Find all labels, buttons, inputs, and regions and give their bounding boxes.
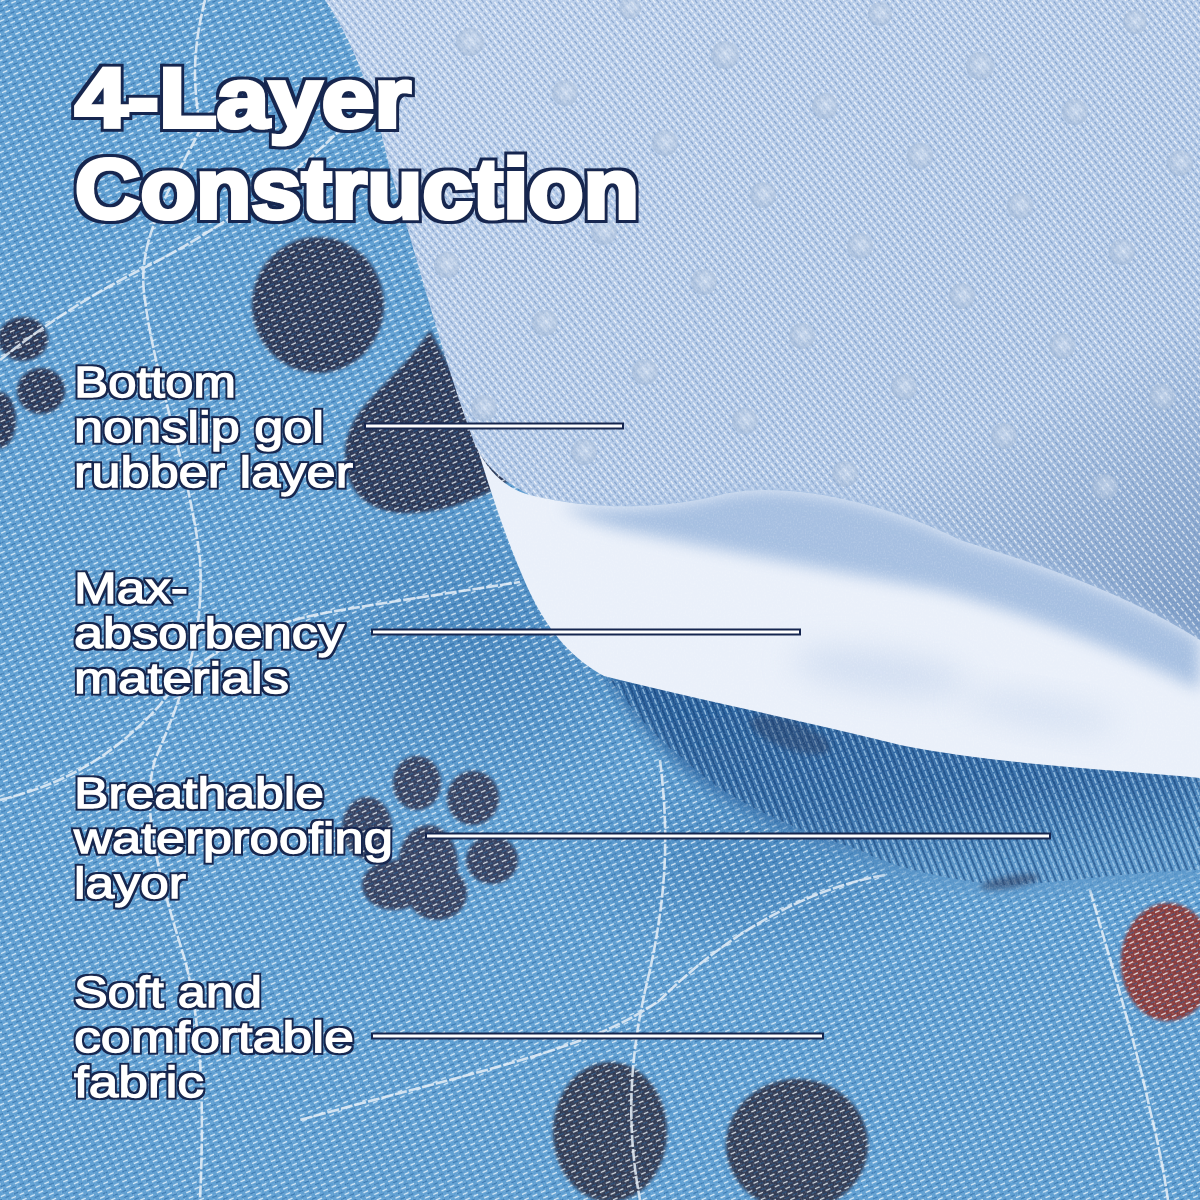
label text bbox=[74, 968, 354, 1107]
faint paw pad on fold bbox=[746, 707, 834, 763]
label text: nonslip gol bbox=[74, 403, 324, 452]
label text: Bottom bbox=[74, 358, 236, 407]
panel: white absorbent batting layer bbox=[478, 450, 1200, 778]
paw print: bottom pads bbox=[553, 1062, 868, 1200]
leader line bbox=[365, 424, 623, 428]
label text bbox=[73, 769, 393, 908]
paw print: upper pad and toes bbox=[0, 237, 510, 513]
panel: dark underside fold of fabric bbox=[600, 660, 1200, 893]
water droplets bbox=[434, 0, 1193, 500]
label text: waterproofing bbox=[73, 814, 393, 863]
leader line bbox=[372, 630, 800, 634]
label text bbox=[74, 564, 344, 703]
blue-grey upper band of batting bbox=[560, 490, 1200, 690]
shaded patches bbox=[788, 640, 972, 704]
callout: bottom nonslip rubber layer bbox=[74, 358, 623, 497]
callout: breathable waterproofing layer bbox=[73, 769, 1050, 908]
title bbox=[75, 51, 639, 236]
callout: soft and comfortable fabric bbox=[74, 968, 823, 1107]
leader line bbox=[426, 834, 1050, 838]
label text: rubber layer bbox=[74, 448, 353, 497]
label text: Soft and bbox=[74, 968, 262, 1017]
title: Construction bbox=[75, 142, 639, 236]
title: 4-Layer bbox=[75, 51, 411, 145]
label text: materials bbox=[74, 654, 289, 703]
callout: max-absorbency materials bbox=[74, 564, 800, 703]
leader line bbox=[372, 1034, 823, 1038]
label text bbox=[74, 358, 353, 497]
label text: fabric bbox=[74, 1058, 204, 1107]
red paw pad bbox=[1121, 903, 1200, 1021]
label text: Max- bbox=[74, 564, 188, 613]
panel: light nonslip bottom sheet with droplets bbox=[325, 0, 1200, 650]
paw print: middle bbox=[342, 756, 518, 920]
label text: absorbency bbox=[74, 609, 344, 658]
label text: comfortable bbox=[74, 1013, 354, 1062]
label text: layor bbox=[74, 859, 186, 908]
label text: Breathable bbox=[74, 769, 324, 818]
